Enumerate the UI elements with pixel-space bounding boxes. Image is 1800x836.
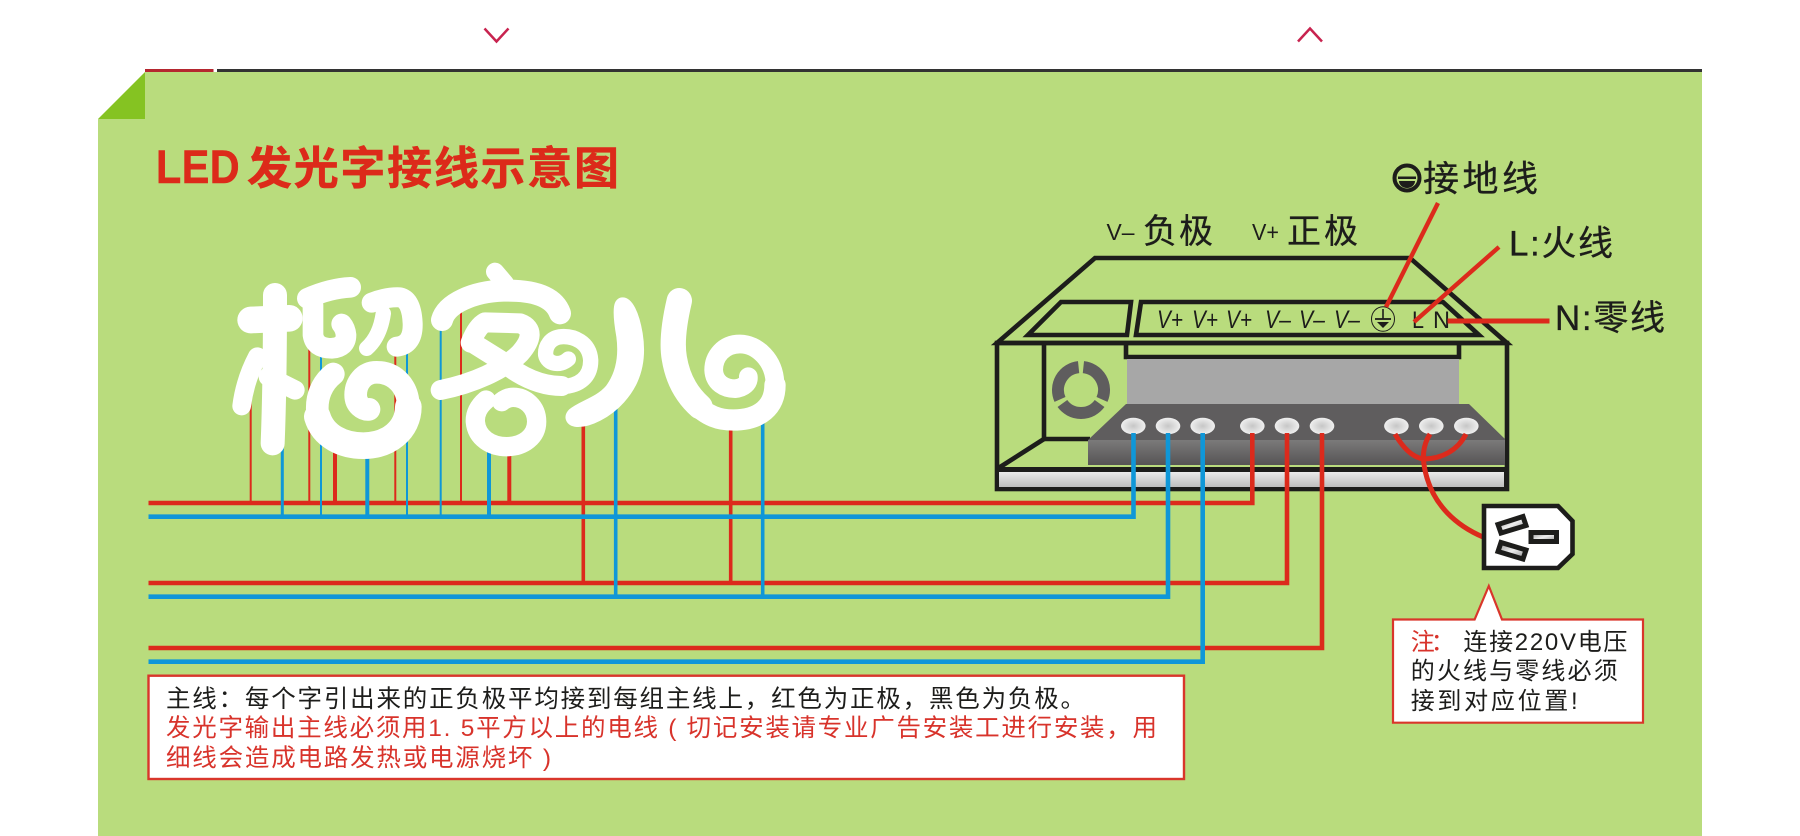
screw terminals [1121,418,1479,434]
chevron down [484,28,508,42]
earth label: 接地线 [1423,158,1538,199]
title: 发光字接线示意图 [247,143,619,194]
voltage warning callout: 接到对应位置! [1411,688,1578,715]
polarity labels [1106,213,1358,251]
supply body outline [997,258,1507,489]
red main wires [148,433,1322,648]
letter 1 radical [242,287,413,443]
white channel letters [242,272,775,447]
folded corner [98,72,145,119]
AC input wires [1395,434,1483,537]
polarity labels: V– [1106,219,1135,245]
main wire note: 细线会造成电路发热或电源烧坏 ) [166,744,551,772]
blue main wires [148,433,1203,662]
polarity labels: 正极 [1287,213,1358,251]
voltage warning callout [1393,586,1643,723]
silver base [997,343,1509,491]
letter 2 lower loop [475,397,537,447]
letter 3 [567,298,775,426]
power plug [1484,506,1572,568]
terminal labels [1157,306,1450,334]
earth symbol large [1394,166,1420,190]
letter 2 [441,272,591,390]
title: LED [156,142,240,194]
terminal labels: N [1433,307,1450,334]
live label: L:火线 [1509,224,1613,264]
terminal labels: V+ [1226,306,1252,334]
letter 1 spiral [317,372,408,446]
voltage warning callout: 的火线与零线必须 [1411,658,1618,685]
terminal labels: V– [1334,306,1361,334]
power supply [997,258,1509,491]
fan vent [1058,367,1104,413]
polarity labels: 负极 [1143,213,1213,251]
voltage warning callout: 注： [1411,629,1455,656]
ground symbol small [1372,307,1394,331]
red branch wires [251,305,731,583]
grey cover [1127,359,1459,404]
main wire note: 主线：每个字引出来的正负极平均接到每组主线上，红色为正极，黑色为负极。 [166,685,1085,713]
terminal labels: V– [1265,306,1292,334]
earth pointer [1386,203,1438,307]
live pointer [1414,247,1499,322]
polarity labels: V+ [1252,219,1279,245]
top rule [145,69,1702,72]
neutral pointer [1448,318,1550,324]
blue branch wires [282,320,763,597]
terminal labels: V+ [1192,306,1218,334]
terminal labels: V+ [1157,306,1183,334]
chevron up [1298,28,1322,42]
neutral label: N:零线 [1555,299,1665,338]
main wire note: 发光字输出主线必须用1. 5平方以上的电线 ( 切记安装请专业广告安装工进行安装，用 [166,714,1157,742]
voltage warning callout: 连接220V电压 [1463,629,1627,656]
terminal labels: V– [1299,306,1326,334]
main wire note [148,676,1184,779]
terminal labels: L [1412,307,1424,334]
terminal block [1088,404,1507,465]
